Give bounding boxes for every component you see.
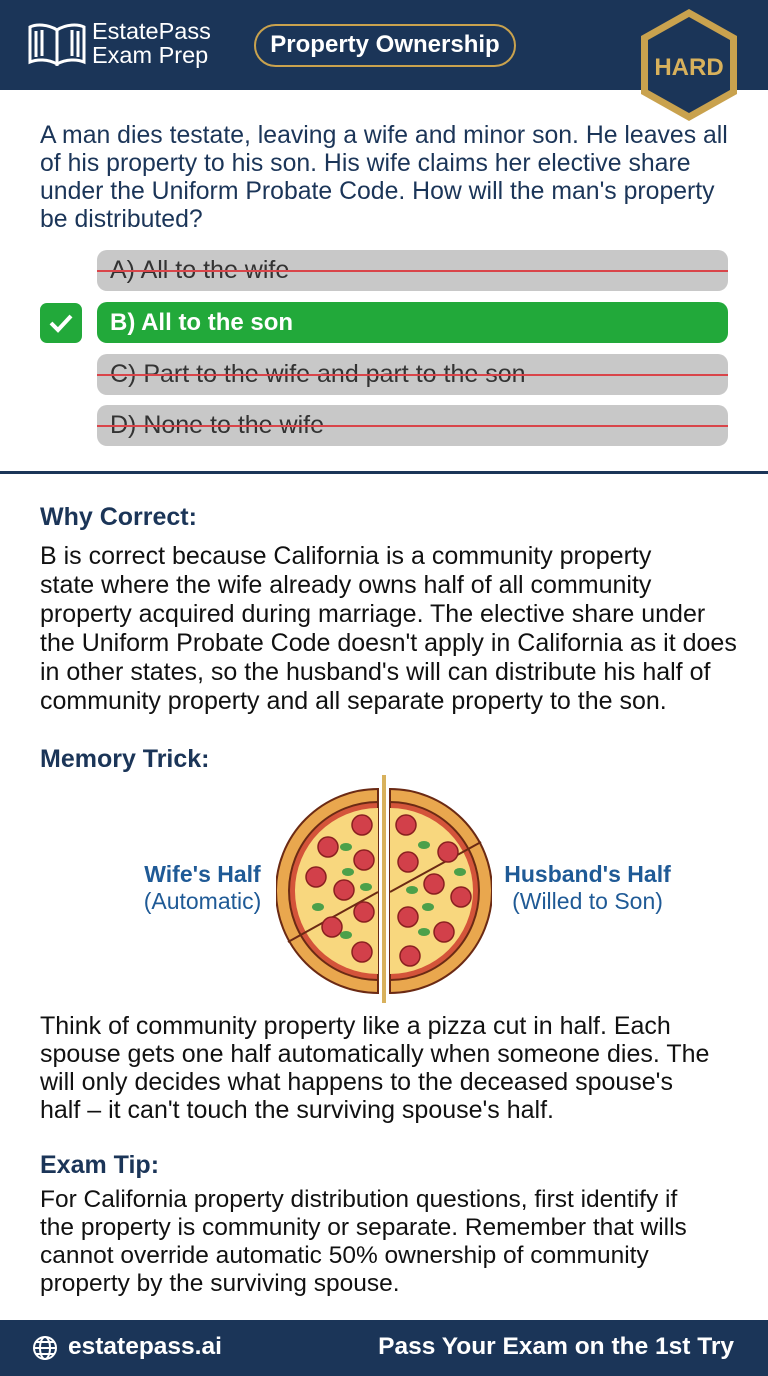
footer — [0, 1320, 768, 1376]
memory trick text: spouse gets one half automatically when someone dies. The — [40, 1040, 709, 1068]
footer url: estatepass.ai — [68, 1333, 222, 1360]
label: husband's half: Husband's Half — [504, 861, 671, 887]
logo text — [92, 18, 211, 68]
label: wife's half: (Automatic) — [144, 888, 261, 914]
why correct text: state where the wife already owns half of all community — [40, 571, 651, 599]
option C: C) Part to the wife and part to the son — [110, 360, 526, 388]
label: husband's half — [504, 861, 671, 914]
heading: why correct: Why Correct: — [40, 503, 197, 531]
option C — [97, 354, 728, 395]
exam tip text: cannot override automatic 50% ownership of community — [40, 1242, 649, 1269]
exam tip text: the property is community or separate. Remember that wills — [40, 1214, 687, 1241]
icon: globe — [33, 1336, 57, 1360]
why correct text: B is correct because California is a community property — [40, 542, 651, 570]
exam tip text — [40, 1186, 687, 1297]
header bar — [0, 0, 768, 90]
pizza illustration — [276, 775, 492, 1003]
question: of his property to his son. His wife claims her elective share — [40, 150, 690, 177]
option A — [97, 250, 728, 291]
why correct text: community property and all separate property to the son. — [40, 687, 667, 715]
option D: D) None to the wife — [110, 411, 324, 439]
heading: exam tip: Exam Tip: — [40, 1151, 159, 1179]
option A: A) All to the wife — [110, 256, 289, 284]
badge: HARD: HARD — [654, 54, 724, 81]
option D — [97, 405, 728, 446]
label: wife's half — [144, 861, 261, 914]
question: under the Uniform Probate Code. How will the man's property — [40, 178, 715, 205]
heading: memory trick: Memory Trick: — [40, 745, 210, 773]
question: be distributed? — [40, 206, 203, 233]
logo text: EstatePass — [92, 18, 211, 44]
memory trick text — [40, 1012, 709, 1124]
question: A man dies testate, leaving a wife and minor son. He leaves all — [40, 122, 728, 149]
exam tip text: property by the surviving spouse. — [40, 1270, 400, 1297]
option B correct: B) All to the son — [110, 309, 293, 336]
topic pill — [254, 24, 516, 67]
question — [40, 122, 728, 233]
memory trick text: will only decides what happens to the deceased spouse's — [40, 1068, 673, 1096]
icon: book — [28, 24, 86, 66]
label: wife's half: Wife's Half — [144, 861, 261, 887]
why correct text: in other states, so the husband's will can distribute his half of — [40, 658, 710, 686]
memory trick text: Think of community property like a pizza cut in half. Each — [40, 1012, 671, 1040]
exam tip text: For California property distribution questions, first identify if — [40, 1186, 677, 1213]
memory trick text: half – it can't touch the surviving spouse's half. — [40, 1096, 554, 1124]
footer slogan: Pass Your Exam on the 1st Try — [378, 1333, 734, 1360]
label: husband's half: (Willed to Son) — [512, 888, 663, 914]
logo text: Exam Prep — [92, 42, 208, 68]
why correct text: property acquired during marriage. The elective share under — [40, 600, 705, 628]
why correct text: the Uniform Probate Code doesn't apply in California as it does — [40, 629, 737, 657]
topic pill: Property Ownership — [270, 31, 500, 58]
check icon — [40, 303, 82, 343]
option B correct — [97, 302, 728, 343]
badge: HARD — [641, 9, 737, 121]
why correct text — [40, 542, 737, 715]
